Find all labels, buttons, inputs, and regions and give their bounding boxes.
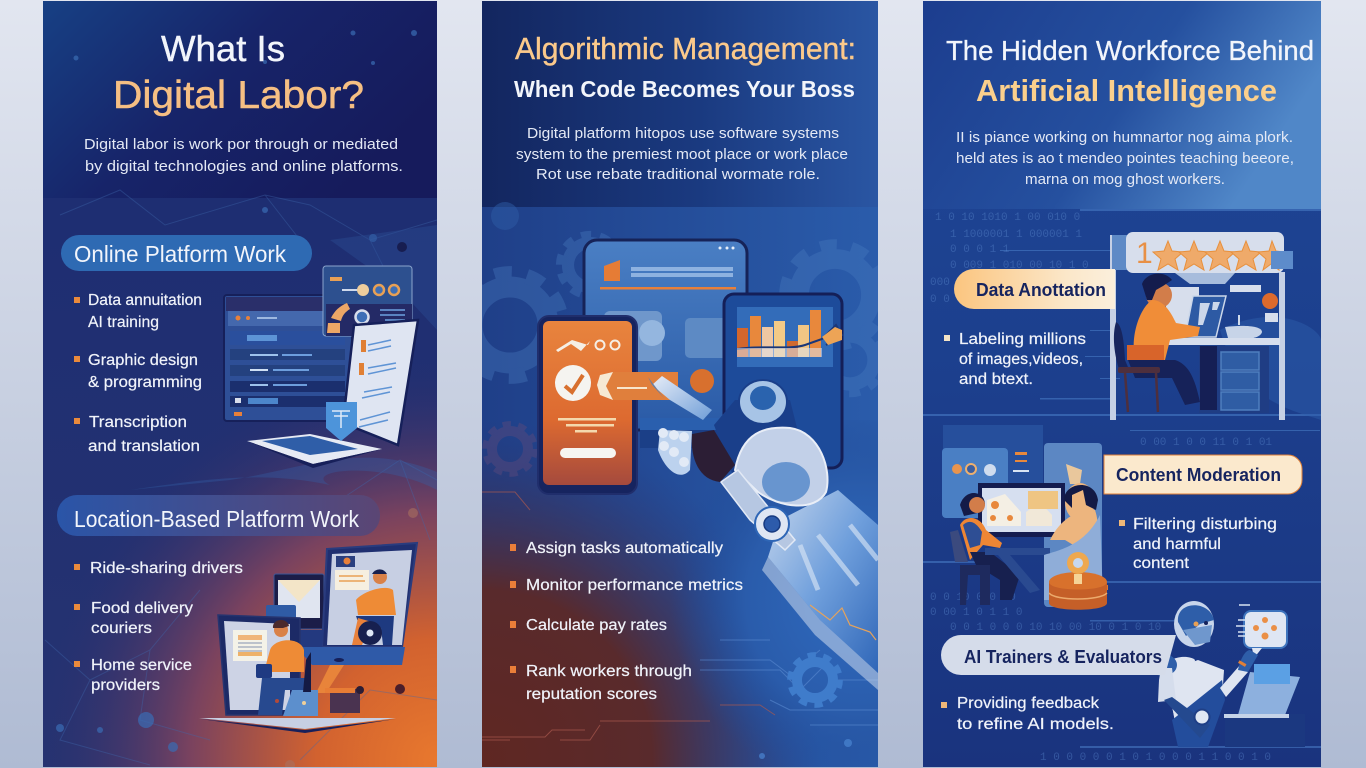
illustration: content moderators [942,425,1108,610]
subtitle: when code becomes your boss: When Code Becomes Your Boss [514,76,855,102]
list: online platform work: Transcription [89,414,187,431]
illustration: annotator at desk with star rating [1110,232,1293,420]
binary text background: 000 [930,277,950,289]
illustration: main tablet [584,240,750,448]
pill: content moderation: Content Moderation [1116,465,1281,485]
list: online platform work: and translation [88,438,200,455]
illustration: gig workers at screens [199,543,417,733]
illustration: robot trainer with laptop [1149,601,1305,747]
title: the hidden workforce behind: The Hidden Workforce Behind [946,35,1314,66]
title: algorithmic management: Algorithmic Management: [515,31,856,66]
list: location-based platform work: Ride-sharing drivers [90,560,243,577]
illustration: annotator at desk with star rating: 1 [1136,237,1153,270]
title: what is: What Is [161,28,285,69]
list: online platform work: Data annuitation [88,292,202,309]
intro text: held ates is ao t mendeo pointes teaching beeore, [956,151,1294,167]
list: algorithmic management [510,540,743,703]
intro text: by digital technologies and online platforms. [85,159,403,175]
list: data annotation: of images,videos, [959,351,1083,368]
list: location-based platform work: couriers [91,620,152,637]
list: ai trainers and evaluators: Providing feedback [957,695,1099,712]
list: algorithmic management: Rank workers through [526,663,692,680]
pill: location-based platform work: Location-Based Platform Work [74,506,359,532]
binary text background: 0 009 1 010 00 10 1 0 [950,260,1089,272]
binary text background: 0 00 1 0 0 11 0 1 01 [1140,437,1272,449]
panel: algorithmic management [459,1,884,767]
binary text background: 0 0 1 0 0 0 10 10 00 10 0 1 0 10 [950,622,1161,634]
illustration: robot arm [648,376,878,690]
list: location-based platform work: Home service [91,657,192,674]
illustration: laptop with dashboard and document [224,266,418,468]
intro text: Digital labor is work por through or mediated [84,137,398,153]
list: data annotation: Labeling millions [959,331,1086,348]
list: location-based platform work: providers [91,677,160,694]
list: algorithmic management: Monitor performance metrics [526,577,743,594]
intro text [84,137,403,175]
list: content moderation [1119,516,1277,572]
intro text [516,126,848,183]
intro text: system to the premiest moot place or work place [516,147,848,163]
title: artificial intelligence: Artificial Intelligence [976,73,1277,108]
intro text: Rot use rebate traditional wormate role. [536,167,820,183]
illustration: phone with approval screen [538,316,678,494]
list: online platform work: Graphic design [88,352,198,369]
list: location-based platform work: Food delivery [91,600,193,617]
list: content moderation: Filtering disturbing [1133,516,1277,533]
illustration: right tablet with bar chart [724,294,842,468]
list: online platform work: AI training [88,314,159,331]
list: content moderation: content [1133,555,1190,572]
list: algorithmic management: Calculate pay rates [526,617,667,634]
binary text background: 0 0 0 1 1 [950,244,1010,256]
title: digital labor: Digital Labor? [113,74,364,117]
list: content moderation: and harmful [1133,536,1221,553]
panel: hidden workforce [923,1,1321,767]
pill: location-based platform work [57,495,380,536]
list: data annotation: and btext. [959,371,1033,388]
pill: data annotation [954,269,1115,309]
intro text: Digital platform hitopos use software systems [527,126,839,142]
panel: what is digital labor [43,1,437,768]
pill: ai trainers and evaluators [941,635,1176,675]
binary text background: 1 0 0 0 0 0 1 0 1 0 0 0 1 1 0 0 1 0 [1040,752,1271,764]
list: algorithmic management: reputation scores [526,686,657,703]
pill: online platform work: Online Platform Work [74,241,286,267]
list: online platform work: & programming [88,374,202,391]
pill: content moderation [1104,455,1302,494]
pill: online platform work [61,235,312,271]
list: online platform work [74,292,202,455]
intro text: II is piance working on humnartor nog aima plork. [956,130,1293,146]
binary text background: 0 0 10 010 00 [930,592,1016,604]
pill: ai trainers and evaluators: AI Trainers & Evaluators [964,647,1162,667]
list: algorithmic management: Assign tasks automatically [526,540,723,557]
binary text background: 0 0 [930,294,950,306]
pill: data annotation: Data Anottation [976,280,1106,300]
binary text background: 1 0 10 1010 1 00 010 0 [935,212,1080,224]
list: location-based platform work [74,560,243,694]
binary text background: 0 00 1 0 1 1 0 [930,607,1022,619]
intro text: marna on mog ghost workers. [1025,172,1225,188]
list: data annotation [944,331,1086,388]
list: ai trainers and evaluators: to refine AI models. [957,716,1114,733]
intro text [956,130,1294,188]
binary text background: 1 1000001 1 000001 1 [950,229,1082,241]
list: ai trainers and evaluators [941,696,1112,730]
binary text background [930,212,1272,764]
